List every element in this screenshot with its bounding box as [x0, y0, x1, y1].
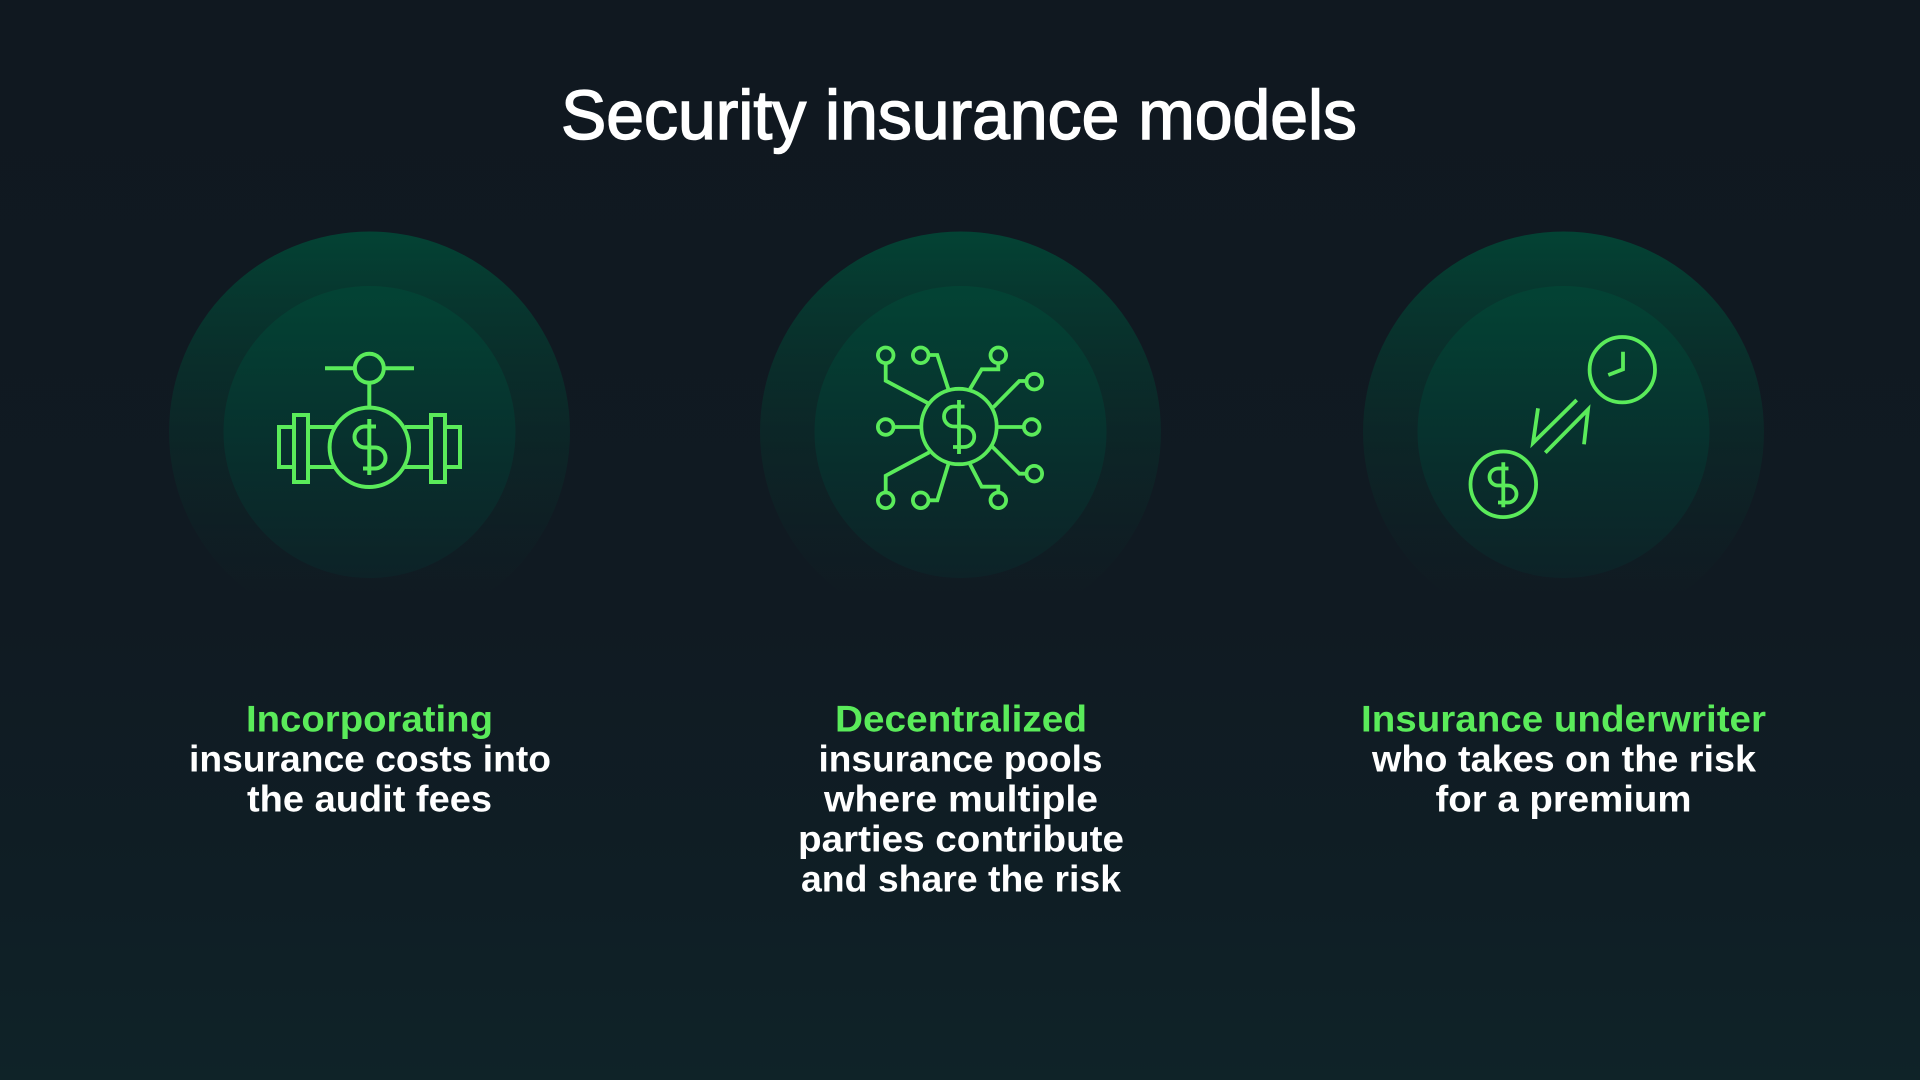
text: decentralized: insurance pools — [818, 739, 1102, 780]
text: decentralized: where multiple — [823, 779, 1098, 820]
text: incorporating — [189, 699, 551, 820]
panel: insurance underwriter — [1361, 232, 1766, 820]
text: decentralized — [798, 699, 1124, 900]
icon: dollar exchanged with clock — [1470, 337, 1655, 517]
text: insurance underwriter: for a premium — [1436, 779, 1692, 820]
title: Security insurance models — [561, 76, 1357, 154]
icon backdrop: concentric circles — [169, 232, 570, 632]
text: insurance underwriter — [1361, 699, 1766, 820]
icon: dollar network — [878, 348, 1042, 508]
text: incorporating: insurance costs into — [189, 739, 551, 780]
text: insurance underwriter: Insurance underwriter — [1361, 699, 1766, 740]
text: insurance underwriter: who takes on the risk — [1371, 739, 1756, 780]
text: incorporating: the audit fees — [247, 779, 492, 820]
text: decentralized: Decentralized — [835, 699, 1087, 740]
text: decentralized: parties contribute — [798, 819, 1124, 860]
text: decentralized: and share the risk — [801, 859, 1121, 900]
icon backdrop: concentric circles — [1363, 232, 1764, 632]
panel: incorporating insurance costs — [169, 232, 570, 820]
text: incorporating: Incorporating — [246, 699, 493, 740]
panel: decentralized insurance pools — [760, 232, 1161, 900]
icon backdrop: concentric circles — [760, 232, 1161, 632]
icon: pipe valve with dollar — [279, 354, 460, 487]
